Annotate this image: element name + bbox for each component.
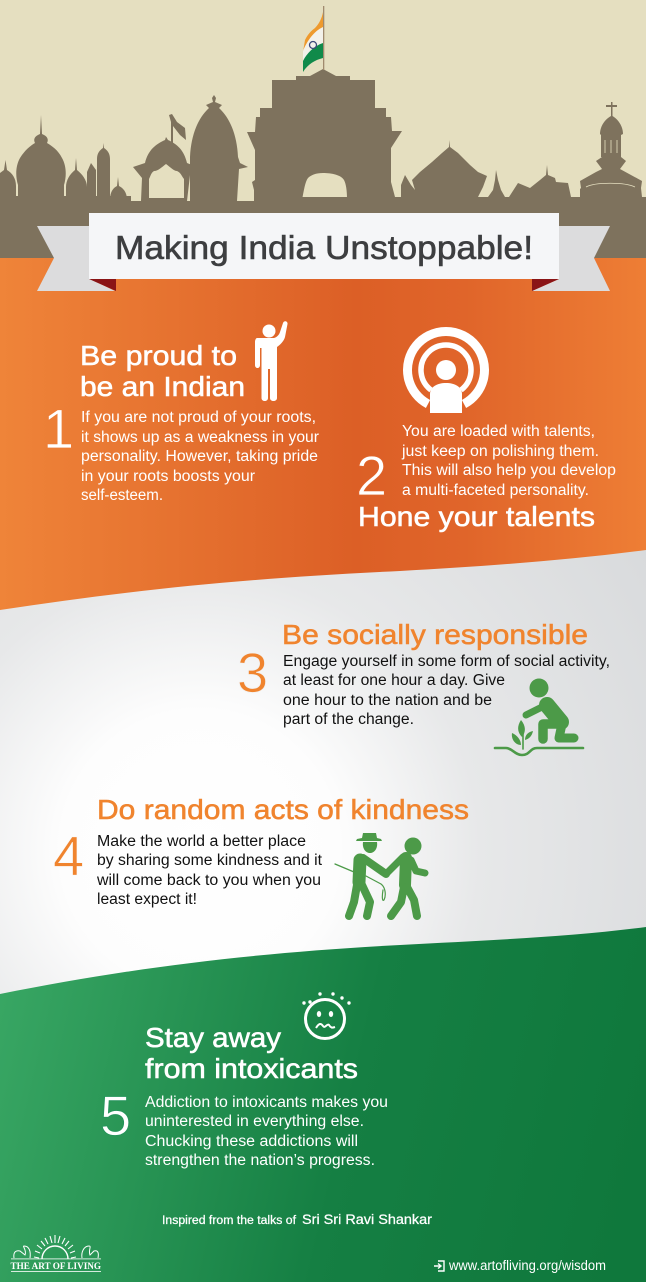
background: sky bbox=[0, 0, 646, 262]
body 3: one hour to the nation and be bbox=[283, 692, 492, 709]
second dome bbox=[66, 158, 87, 200]
credit line bbox=[162, 1212, 433, 1227]
panel: item 1 bbox=[43, 321, 319, 504]
heading 1: be an Indian bbox=[80, 371, 245, 402]
title: Making India Unstoppable! bbox=[115, 229, 533, 266]
india gate bbox=[247, 69, 402, 213]
base strip bbox=[0, 196, 646, 258]
body 1: in your roots boosts your bbox=[81, 468, 255, 485]
body 1: self-esteem. bbox=[81, 487, 163, 504]
small left dome bbox=[0, 160, 16, 200]
credit line: Inspired from the talks of bbox=[162, 1215, 297, 1227]
number 2: 2 bbox=[356, 444, 387, 507]
body 5: uninterested in everything else. bbox=[145, 1113, 364, 1130]
body 1: it shows up as a weakness in your bbox=[81, 429, 319, 446]
body 3: part of the change. bbox=[283, 711, 414, 728]
body 3: Engage yourself in some form of social activity, bbox=[283, 653, 610, 670]
heading 4: Do random acts of kindness bbox=[97, 794, 469, 825]
panel: item 4 bbox=[53, 794, 469, 916]
number 4: 4 bbox=[53, 824, 84, 887]
body 4: Make the world a better place bbox=[97, 833, 306, 850]
spire bbox=[488, 170, 505, 197]
body 5: Chucking these addictions will bbox=[145, 1133, 358, 1150]
body 1: If you are not proud of your roots, bbox=[81, 409, 316, 426]
band: orange bbox=[0, 258, 646, 620]
icon: podcast broadcast person bbox=[407, 331, 485, 413]
small tower bbox=[87, 163, 96, 200]
number 5: 5 bbox=[100, 1084, 131, 1147]
ribbon tail: right bbox=[532, 226, 610, 291]
church bbox=[580, 102, 642, 197]
third dome bbox=[110, 177, 127, 200]
credit line: Sri Sri Ravi Shankar bbox=[302, 1212, 433, 1227]
body 4: least expect it! bbox=[97, 891, 197, 908]
icon: worried face bbox=[302, 992, 351, 1038]
band: white bbox=[0, 550, 646, 1000]
body 3: at least for one hour a day. Give bbox=[283, 672, 505, 689]
heading 3: Be socially responsible bbox=[282, 619, 588, 650]
skyline illustration bbox=[0, 69, 646, 258]
icon: person raising hand bbox=[255, 321, 288, 401]
body 2: just keep on polishing them. bbox=[401, 443, 599, 460]
body 4: will come back to you when you bbox=[96, 872, 321, 889]
title ribbon bbox=[37, 213, 610, 291]
number 1: 1 bbox=[43, 397, 74, 460]
logo: The Art of Living: THE ART OF LIVING bbox=[10, 1262, 102, 1272]
heading 1: Be proud to bbox=[80, 340, 237, 371]
logo: The Art of Living bbox=[10, 1235, 102, 1272]
heading 2: Hone your talents bbox=[358, 501, 595, 532]
temple flag bbox=[169, 114, 186, 145]
panel: item 3 bbox=[237, 619, 610, 755]
big dome bbox=[16, 115, 66, 200]
ribbon tail: left bbox=[37, 226, 115, 291]
heading 5: Stay away bbox=[145, 1022, 281, 1053]
body 4: by sharing some kindness and it bbox=[97, 852, 323, 869]
body 5: strengthen the nation’s progress. bbox=[145, 1152, 375, 1169]
tall tower bbox=[97, 143, 110, 200]
body 1: personality. However, taking pride bbox=[81, 448, 318, 465]
church details bbox=[586, 140, 635, 187]
number 3: 3 bbox=[237, 641, 268, 704]
body 5: Addiction to intoxicants makes you bbox=[145, 1094, 388, 1111]
body 2: This will also help you develop bbox=[402, 462, 616, 479]
panel: item 2 bbox=[356, 331, 616, 532]
icon: sign in bbox=[434, 1261, 444, 1271]
icon: person guiding blind person bbox=[335, 833, 425, 916]
roofs bbox=[509, 165, 571, 197]
temple with arch bbox=[133, 137, 192, 201]
small stupa and thai temple bbox=[401, 140, 487, 197]
website link: www.artofliving.org/wisdom bbox=[448, 1258, 606, 1273]
body 2: You are loaded with talents, bbox=[402, 423, 595, 440]
body 2: a multi-faceted personality. bbox=[402, 482, 589, 499]
shikhara tower bbox=[190, 95, 248, 201]
panel: item 5 bbox=[100, 992, 388, 1169]
band: green bbox=[0, 927, 646, 1282]
heading 5: from intoxicants bbox=[145, 1053, 358, 1084]
flag on pole bbox=[303, 6, 324, 72]
icon: person planting sapling bbox=[495, 678, 583, 755]
